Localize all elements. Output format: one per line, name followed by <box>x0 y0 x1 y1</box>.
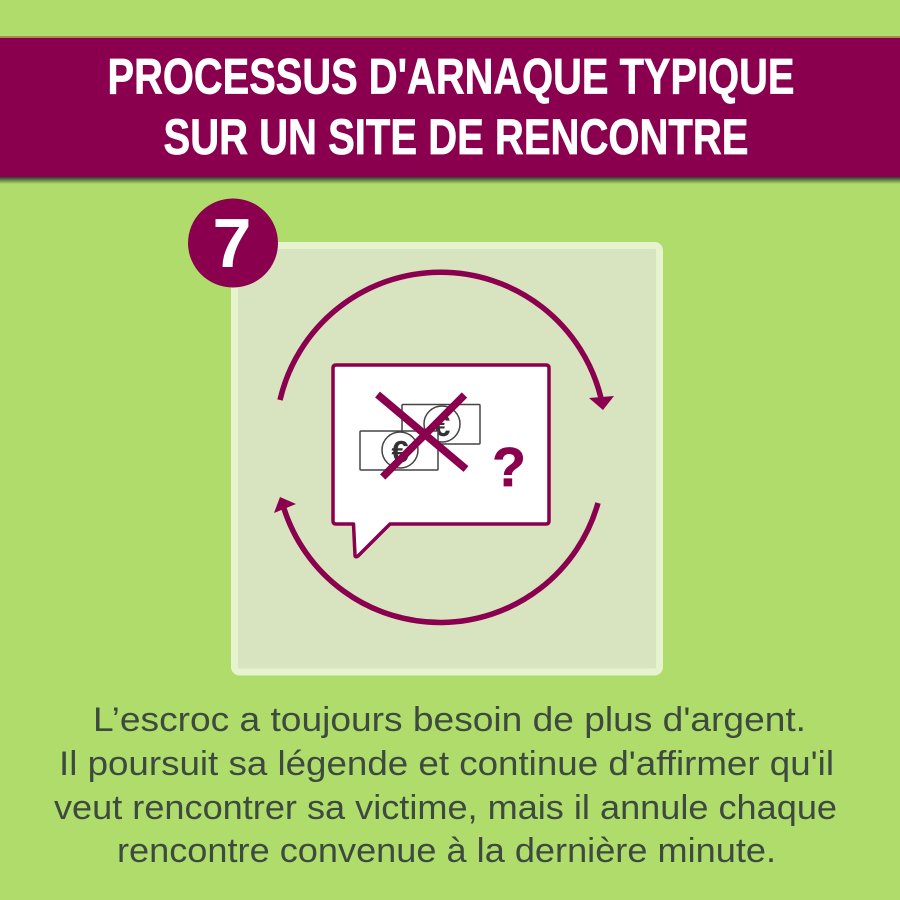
description text <box>54 701 837 870</box>
step number badge <box>188 198 278 288</box>
icon: euro banknotes <box>360 404 480 470</box>
title <box>108 48 794 165</box>
panel: illustration <box>234 246 660 672</box>
speech bubble <box>333 365 549 557</box>
description text: L’escroc a toujours besoin de plus d'argent. <box>93 701 806 739</box>
title banner <box>0 36 900 184</box>
description text: Il poursuit sa légende et continue d'affirmer qu'il <box>59 745 834 783</box>
icon: cross <box>378 394 466 477</box>
arrow: top arc <box>280 272 614 410</box>
question mark: ? <box>492 436 526 498</box>
description text: veut rencontrer sa victime, mais il annule chaque <box>54 789 837 827</box>
step number badge: 7 <box>213 204 251 282</box>
description text: rencontre convenue à la dernière minute. <box>117 832 776 870</box>
cycle arrows <box>274 272 614 622</box>
banknote: front: € <box>391 434 409 469</box>
banknote: back: € <box>434 410 451 443</box>
arrow: bottom arc <box>274 497 598 622</box>
title: SUR UN SITE DE RENCONTRE <box>164 109 748 165</box>
